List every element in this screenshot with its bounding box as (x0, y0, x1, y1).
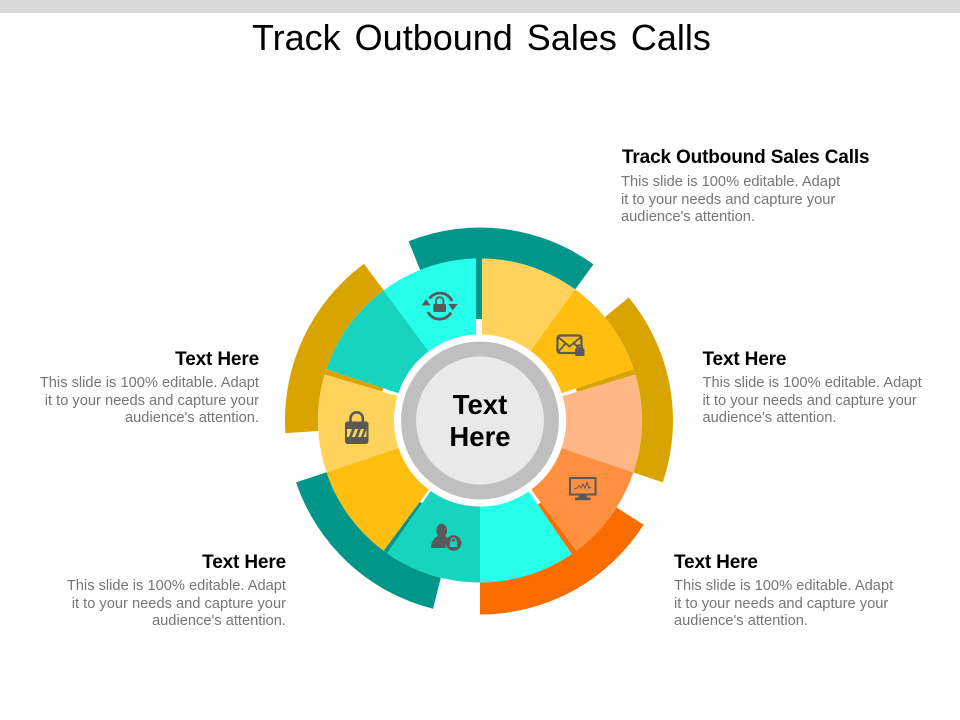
segment: cyan bottom (479, 491, 572, 583)
body text: This slide is 100% editable. Adapt (702, 375, 922, 391)
body text: audience's attention. (674, 613, 808, 629)
segment: light yellow top (482, 258, 576, 351)
body text: it to your needs and capture your (72, 596, 286, 612)
segment: cyan top (384, 258, 476, 351)
outer arc: top teal (409, 228, 593, 319)
heading: Text Here (674, 552, 758, 573)
segment: peach right (562, 374, 642, 472)
text block: top right heading and body (621, 146, 869, 225)
text block: right (702, 348, 922, 426)
body text (674, 578, 894, 629)
body text: audience's attention. (152, 613, 286, 629)
outer arc: bottom orange (480, 502, 644, 614)
body text: This slide is 100% editable. Adapt (67, 578, 286, 594)
segment: gold lower left (326, 448, 429, 551)
segment: light yellow left (318, 374, 398, 472)
heading: Text Here (702, 348, 786, 370)
body text: This slide is 100% editable. Adapt (40, 375, 259, 391)
body text: audience's attention. (125, 410, 259, 426)
heading: Text Here (175, 348, 259, 370)
text block: lower right (674, 552, 894, 629)
body text: This slide is 100% editable. Adapt (621, 174, 840, 190)
title: Track Outbound Sales Calls (252, 17, 711, 58)
body text (67, 578, 286, 629)
center grey ring (408, 349, 552, 492)
icon: lock with refresh arrows (422, 293, 458, 319)
body text: This slide is 100% editable. Adapt (674, 578, 893, 594)
segment: orange lower right (531, 448, 633, 551)
segment: teal upper left (326, 290, 429, 393)
body text: it to your needs and capture your (702, 393, 917, 409)
icon: user with lock badge (431, 524, 461, 551)
body text: audience's attention. (702, 410, 836, 426)
segment: gold upper right (531, 289, 634, 393)
text block: lower left (67, 552, 286, 629)
body text: it to your needs and capture your (621, 192, 835, 208)
body text (40, 375, 259, 426)
icon: padlock (345, 412, 368, 444)
icon: monitor with waveform (570, 478, 596, 500)
segment: teal bottom left (387, 491, 480, 582)
outer arc: bottom-left teal (296, 472, 441, 609)
outer arc: right dark yellow (576, 298, 673, 482)
body text (702, 375, 922, 426)
center label: Text (453, 389, 507, 420)
body text: it to your needs and capture your (45, 393, 259, 409)
icon: envelope with lock (558, 336, 584, 356)
center label: Here (449, 421, 511, 452)
body text (621, 174, 840, 225)
text block: left (40, 348, 259, 426)
heading: Text Here (202, 552, 286, 573)
body text: it to your needs and capture your (674, 596, 888, 612)
outer arc: left dark yellow (285, 264, 384, 433)
heading: Track Outbound Sales Calls (622, 146, 869, 168)
top grey bar (0, 0, 960, 13)
body text: audience's attention. (621, 209, 755, 225)
